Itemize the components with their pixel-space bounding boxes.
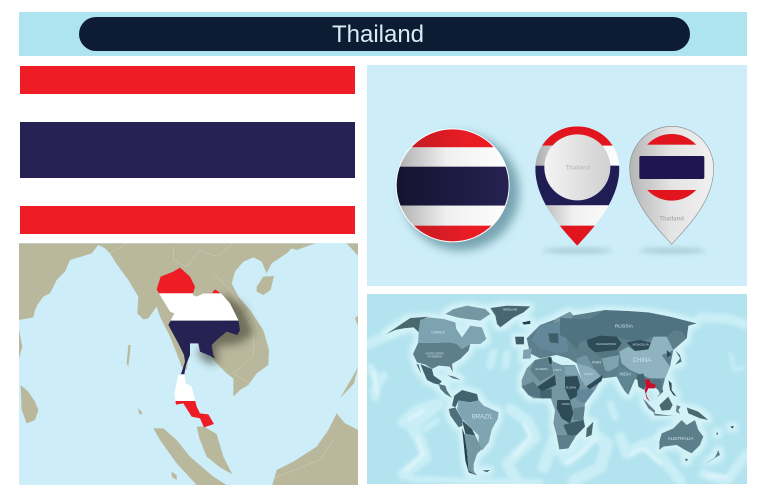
panel: regional map of Southeast Asia	[19, 243, 358, 485]
panel: world map	[367, 294, 747, 484]
flag of Thailand	[20, 66, 355, 234]
africa and europe	[522, 357, 602, 449]
panel: flag icons	[367, 65, 747, 286]
country labels: OF AMERICA	[427, 356, 442, 359]
pin label: Thailand	[566, 165, 591, 171]
regional land masses	[19, 243, 358, 485]
country labels: ALGERIA	[535, 367, 548, 371]
country labels: INDIA	[620, 372, 631, 377]
title: Thailand	[332, 21, 424, 48]
pin label: Thailand	[659, 216, 684, 222]
icon: map pin with ring	[533, 125, 622, 253]
country labels: UNITED STATES	[426, 352, 444, 355]
country labels: GREENLAND	[503, 309, 518, 312]
country labels: SUDAN	[565, 386, 576, 390]
title pill	[79, 17, 690, 51]
country labels: SAUDI	[584, 372, 593, 376]
country labels: BRAZIL	[472, 415, 493, 421]
header band	[19, 12, 747, 56]
Thailand in flag colours	[156, 268, 240, 428]
Thailand highlight	[645, 379, 656, 402]
borders	[110, 243, 333, 478]
americas	[385, 306, 530, 476]
country labels: KAZAKHSTAN	[596, 342, 616, 346]
country labels	[426, 309, 694, 441]
country labels: CHINA	[633, 358, 651, 364]
Thailand drop shadow	[197, 293, 254, 363]
icon: map pin with flag	[630, 126, 714, 253]
country labels: CANADA	[431, 331, 446, 335]
bright current core	[374, 372, 727, 477]
country labels: LIBYA	[553, 368, 561, 372]
icon: round flag badge	[393, 127, 519, 251]
world land masses	[385, 306, 734, 476]
country labels: CONGO	[562, 404, 571, 406]
ocean currents	[369, 317, 747, 482]
country labels: MONGOLIA	[633, 343, 649, 347]
southeast asia and oceania	[637, 373, 734, 465]
country labels: AUSTRALIA	[668, 436, 694, 441]
country labels: IRAN	[592, 360, 601, 364]
asia and europe	[515, 310, 697, 395]
country labels: RUSSIA	[615, 324, 634, 330]
